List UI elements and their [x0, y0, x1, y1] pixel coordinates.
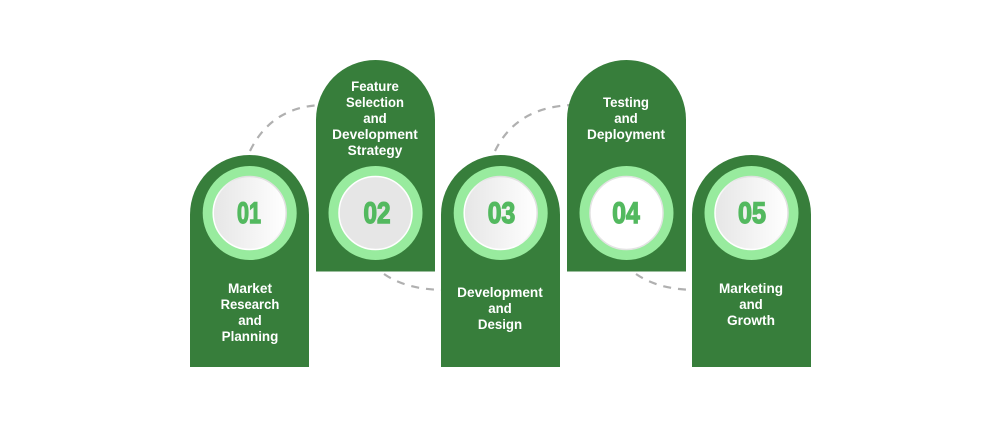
label: step 1: Market: [228, 281, 272, 296]
connector: step 1 to step 2: [250, 105, 322, 151]
label: step 1: [221, 281, 279, 344]
label: step 5: Growth: [727, 313, 775, 328]
label: step 4: Deployment: [587, 127, 666, 142]
number 01: 01: [237, 197, 261, 230]
icon: ring 03: [454, 166, 548, 260]
panel: step 4: [567, 60, 686, 271]
panel: step 1: [190, 155, 309, 367]
connector: step 3 to step 4: [495, 105, 573, 151]
connector: step 2 to step 3: [384, 274, 447, 290]
icon: disc 01: [213, 176, 286, 250]
label: step 4: Testing: [603, 95, 649, 110]
panel: step 2: [316, 60, 435, 271]
label: step 2: Development: [332, 127, 418, 142]
label: step 2: Selection: [346, 95, 404, 110]
label: step 2: Feature: [351, 79, 399, 94]
label: step 5: Marketing: [719, 281, 783, 296]
icon: ring 01: [203, 166, 297, 260]
label: step 1: Research: [221, 297, 279, 312]
label: step 4: [587, 95, 666, 142]
connector: step 4 to step 5: [636, 274, 698, 290]
label: step 4: and: [614, 111, 638, 126]
icon: ring 05: [704, 166, 798, 260]
icon: disc 05: [715, 176, 788, 250]
number 03: 03: [488, 197, 515, 230]
number 04: 04: [612, 197, 640, 230]
label: step 3: Development: [457, 285, 543, 300]
icon: ring 04: [580, 166, 674, 260]
label: step 2: Strategy: [348, 143, 403, 158]
label: step 1: and: [238, 313, 262, 328]
label: step 5: and: [739, 297, 763, 312]
number 02: 02: [364, 197, 390, 230]
panel: step 3: [441, 155, 560, 367]
icon: disc 02: [339, 176, 412, 250]
icon: ring 02: [328, 166, 422, 260]
label: step 2: and: [363, 111, 387, 126]
label: step 3: Design: [478, 317, 522, 332]
icon: disc 04: [590, 176, 663, 250]
label: step 3: and: [488, 301, 512, 316]
number 05: 05: [738, 197, 766, 230]
label: step 3: [457, 285, 543, 332]
label: step 1: Planning: [222, 329, 278, 344]
panel: step 5: [692, 155, 811, 367]
label: step 2: [332, 79, 418, 158]
icon: disc 03: [464, 176, 537, 250]
label: step 5: [719, 281, 783, 328]
